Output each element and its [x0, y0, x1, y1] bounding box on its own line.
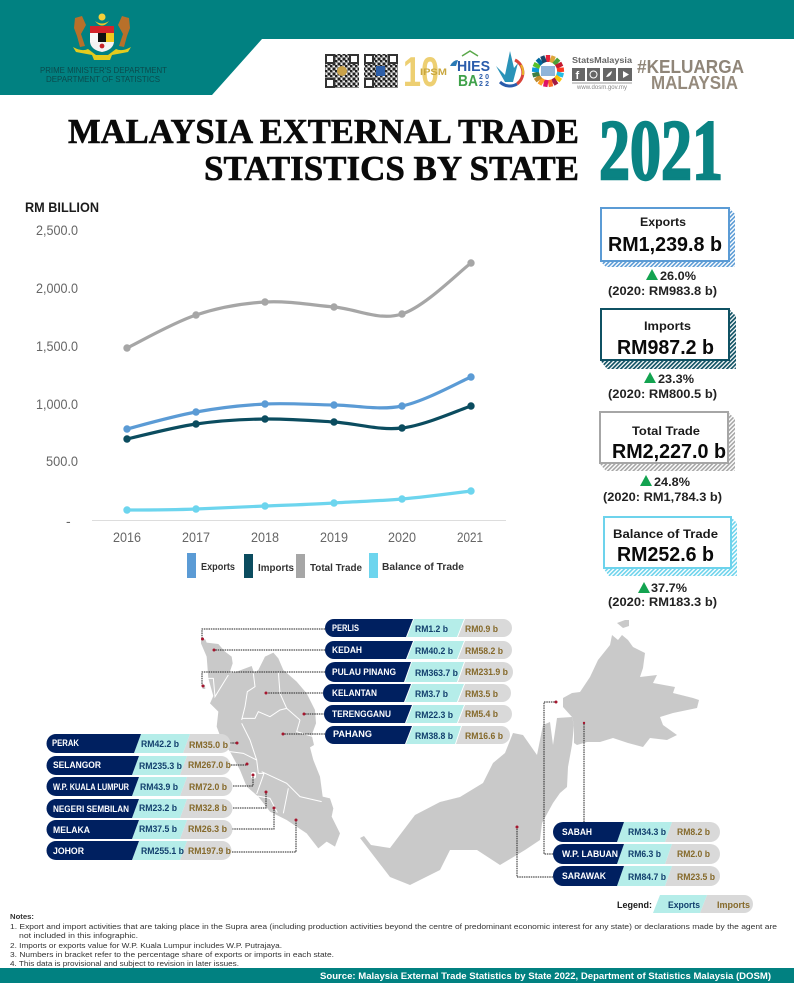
state row: Perlis: PERLIS — [332, 623, 359, 634]
chart legend: Balance of Trade — [382, 562, 464, 573]
state row: Pahang — [325, 726, 510, 744]
notes: not included in this infographic. — [19, 931, 138, 940]
state row: Selangor: RM235.3 b — [139, 761, 182, 771]
line chart — [36, 222, 506, 545]
KPI card: total trade — [599, 412, 735, 504]
KPI card: exports: 26.0% — [660, 269, 696, 283]
state row: Negeri Sembilan: RM32.8 b — [189, 803, 227, 813]
icon: StatsMalaysia social block: StatsMalaysia — [572, 55, 632, 65]
KPI card: imports — [600, 309, 736, 401]
notes: 2. Imports or exports value for W.P. Kuala Lumpur includes W.P. Putrajaya. — [10, 941, 282, 950]
map legend — [617, 895, 753, 913]
KPI card: balance of trade: 37.7% — [651, 581, 687, 595]
state row: W.P. Labuan: RM6.3 b — [628, 849, 661, 859]
x axis labels — [113, 529, 483, 545]
state row: Kedah: KEDAH — [332, 645, 362, 656]
notes: 4. This data is provisional and subject to revision in later issues. — [10, 959, 239, 968]
map legend: Exports — [668, 900, 700, 910]
KPI card: balance of trade: (2020: RM183.3 b) — [608, 595, 717, 609]
icon: QR code 1 — [325, 54, 359, 88]
state row: Kedah: RM40.2 b — [415, 646, 453, 656]
title — [68, 112, 579, 188]
KPI card: exports: RM1,239.8 b — [608, 234, 722, 256]
y axis labels: 2,000.0 — [36, 280, 78, 296]
state row: Melaka — [46, 820, 232, 839]
y axis labels: - — [66, 513, 71, 529]
state row: Perak: RM35.0 b — [189, 740, 228, 750]
header band — [0, 0, 794, 95]
state row: W.P. Kuala Lumpur — [46, 777, 232, 796]
state row: Pulau Pinang: RM363.7 b — [415, 668, 458, 678]
notes: Notes: — [10, 912, 34, 921]
icon: HIES BA logo: BA — [458, 73, 478, 90]
chart legend — [187, 553, 464, 578]
KPI card: imports: 23.3% — [658, 372, 694, 386]
icon: StatsMalaysia social block: www.dosm.gov.my — [576, 85, 627, 91]
state row: Sarawak: RM84.7 b — [628, 872, 666, 882]
state row: Melaka: RM37.5 b — [139, 824, 177, 834]
state row: W.P. Labuan: W.P. LABUAN — [562, 849, 618, 860]
KPI card: total trade: (2020: RM1,784.3 b) — [603, 490, 722, 504]
state row: Pulau Pinang — [325, 662, 513, 682]
map of Malaysia — [201, 620, 699, 885]
state row: Perlis: RM1.2 b — [415, 624, 448, 634]
icon: Keluarga Malaysia wordmark: #KELUARGA — [637, 57, 744, 77]
state row: Pulau Pinang: PULAU PINANG — [332, 667, 396, 678]
state row: Negeri Sembilan — [46, 799, 232, 818]
state row: Terengganu — [324, 705, 512, 723]
icon: HIES BA logo: HIES — [457, 58, 490, 75]
state row: Selangor: SELANGOR — [53, 760, 101, 771]
state row: Terengganu: TERENGGANU — [332, 709, 391, 720]
state row: W.P. Kuala Lumpur: W.P. KUALA LUMPUR — [53, 782, 129, 793]
icon: 10 year logo: 10 — [403, 48, 439, 95]
x axis labels: 2016 — [113, 529, 141, 545]
year heading: 2021 — [599, 102, 723, 198]
state row: Perak: RM42.2 b — [141, 739, 179, 749]
state row: Melaka: MELAKA — [53, 825, 90, 836]
state row: Perak — [46, 734, 231, 753]
chart legend: Imports — [258, 563, 294, 574]
x axis labels: 2020 — [388, 529, 416, 545]
state row: Sabah: RM34.3 b — [628, 827, 666, 837]
icon: 10 year logo: IPSM — [420, 67, 447, 77]
series: total trade — [123, 259, 475, 352]
state row: Sabah: RM8.2 b — [677, 827, 710, 837]
series: balance of trade — [123, 487, 475, 514]
state row: W.P. Labuan — [553, 844, 720, 864]
state row: Perak: PERAK — [52, 738, 79, 749]
icon: colourful V logo — [496, 51, 523, 86]
department name: DEPARTMENT OF STATISTICS — [46, 74, 160, 84]
icon: Keluarga Malaysia wordmark: MALAYSIA — [651, 73, 738, 93]
x axis labels: 2019 — [320, 529, 348, 545]
state row: Johor — [46, 841, 232, 860]
KPI card: total trade: 24.8% — [654, 475, 690, 489]
chart legend: Total Trade — [310, 563, 362, 574]
icon: HIES BA logo — [450, 51, 490, 90]
state row: Melaka: RM26.3 b — [188, 824, 227, 834]
y axis labels: 1,000.0 — [36, 396, 78, 412]
y axis labels — [36, 222, 78, 529]
footer band with source: Source: Malaysia External Trade Statistics by State 2022, Department of Statistics Malaysia (DOSM) — [320, 971, 771, 982]
state row: Kelantan — [323, 684, 511, 702]
notes — [10, 912, 777, 968]
icon: coat of arms — [73, 14, 131, 60]
state row: Sabah: SABAH — [562, 827, 592, 838]
state row: Kelantan: RM3.7 b — [415, 689, 448, 699]
chart legend: Exports — [201, 562, 235, 573]
x axis labels: 2017 — [182, 529, 210, 545]
title: MALAYSIA EXTERNAL TRADE — [68, 112, 579, 151]
x axis labels: 2021 — [457, 529, 483, 545]
state row: Selangor: RM267.0 b — [188, 760, 231, 770]
KPI card: total trade: RM2,227.0 b — [612, 441, 726, 463]
series: exports — [123, 373, 475, 433]
state row: Kelantan: RM3.5 b — [465, 689, 498, 699]
icon: SDG wheel — [532, 55, 564, 87]
state row: Terengganu: RM5.4 b — [465, 709, 498, 719]
map legend: Imports — [717, 900, 750, 910]
unit label: RM BILLION — [25, 200, 99, 215]
state row: Sarawak: RM23.5 b — [677, 872, 715, 882]
KPI card: imports: (2020: RM800.5 b) — [608, 387, 717, 401]
state row: Johor: RM197.9 b — [188, 846, 231, 856]
state row: Johor: JOHOR — [53, 846, 84, 857]
state row: Pahang: PAHANG — [333, 729, 372, 740]
KPI card: imports: RM987.2 b — [617, 337, 714, 359]
icon: StatsMalaysia social block — [572, 55, 632, 91]
y axis labels: 1,500.0 — [36, 338, 78, 354]
state row: Sarawak — [553, 866, 720, 886]
map: Sabah — [563, 635, 699, 747]
state row: Negeri Sembilan: NEGERI SEMBILAN — [53, 804, 129, 815]
state row: W.P. Kuala Lumpur: RM72.0 b — [189, 782, 227, 792]
state row: Pulau Pinang: RM231.9 b — [465, 667, 508, 677]
y axis labels: 500.0 — [46, 453, 78, 469]
notes: 1. Export and import activities that are taking place in the Supra area (including production activities beyond the centre of predominant economic interest for any state) or declarations made by the agent are — [10, 922, 777, 931]
department name — [40, 65, 167, 84]
state row: Perlis: RM0.9 b — [465, 624, 498, 634]
KPI card: imports: Imports — [644, 319, 691, 333]
state row: Kedah: RM58.2 b — [465, 646, 503, 656]
map: Sarawak — [360, 717, 574, 885]
title: STATISTICS BY STATE — [204, 149, 579, 188]
state row: Kedah — [325, 641, 512, 659]
state row: Kelantan: KELANTAN — [332, 688, 377, 699]
state row: Sarawak: SARAWAK — [562, 871, 606, 882]
KPI card: balance of trade — [603, 517, 737, 609]
notes: 3. Numbers in bracket refer to the percentage share of exports or imports in each state. — [10, 950, 334, 959]
x axis labels: 2018 — [251, 529, 279, 545]
icon: Keluarga Malaysia wordmark — [637, 57, 744, 93]
leader lines and location markers — [201, 629, 585, 877]
icon: QR code 2 — [364, 54, 398, 88]
state row: W.P. Kuala Lumpur: RM43.9 b — [140, 782, 178, 792]
map legend: Legend: — [617, 900, 652, 910]
KPI card: total trade: Total Trade — [632, 424, 700, 438]
series: imports — [123, 402, 475, 443]
map: Peninsular Malaysia — [201, 638, 340, 848]
state row: Pahang: RM16.6 b — [465, 731, 503, 741]
icon: HIES BA logo: 20 — [479, 74, 489, 81]
state row: Negeri Sembilan: RM23.2 b — [139, 803, 177, 813]
department name: PRIME MINISTER'S DEPARTMENT — [40, 65, 167, 75]
state row: Pahang: RM38.8 b — [415, 731, 453, 741]
state row: Sabah — [553, 822, 720, 842]
state row: Perlis — [325, 619, 512, 637]
footer band with source — [0, 968, 794, 983]
state row: Johor: RM255.1 b — [141, 846, 184, 856]
state row: Terengganu: RM22.3 b — [415, 710, 453, 720]
y axis labels: 2,500.0 — [36, 222, 78, 238]
KPI card: balance of trade: Balance of Trade — [613, 527, 718, 541]
KPI card: exports — [600, 208, 735, 298]
state row: Selangor — [46, 756, 231, 775]
KPI card: exports: (2020: RM983.8 b) — [608, 284, 717, 298]
state row: W.P. Labuan: RM2.0 b — [677, 849, 710, 859]
KPI card: balance of trade: RM252.6 b — [617, 544, 714, 566]
icon: StatsMalaysia social block: f — [576, 70, 580, 82]
icon: HIES BA logo: 22 — [479, 81, 489, 88]
KPI card: exports: Exports — [640, 215, 686, 229]
